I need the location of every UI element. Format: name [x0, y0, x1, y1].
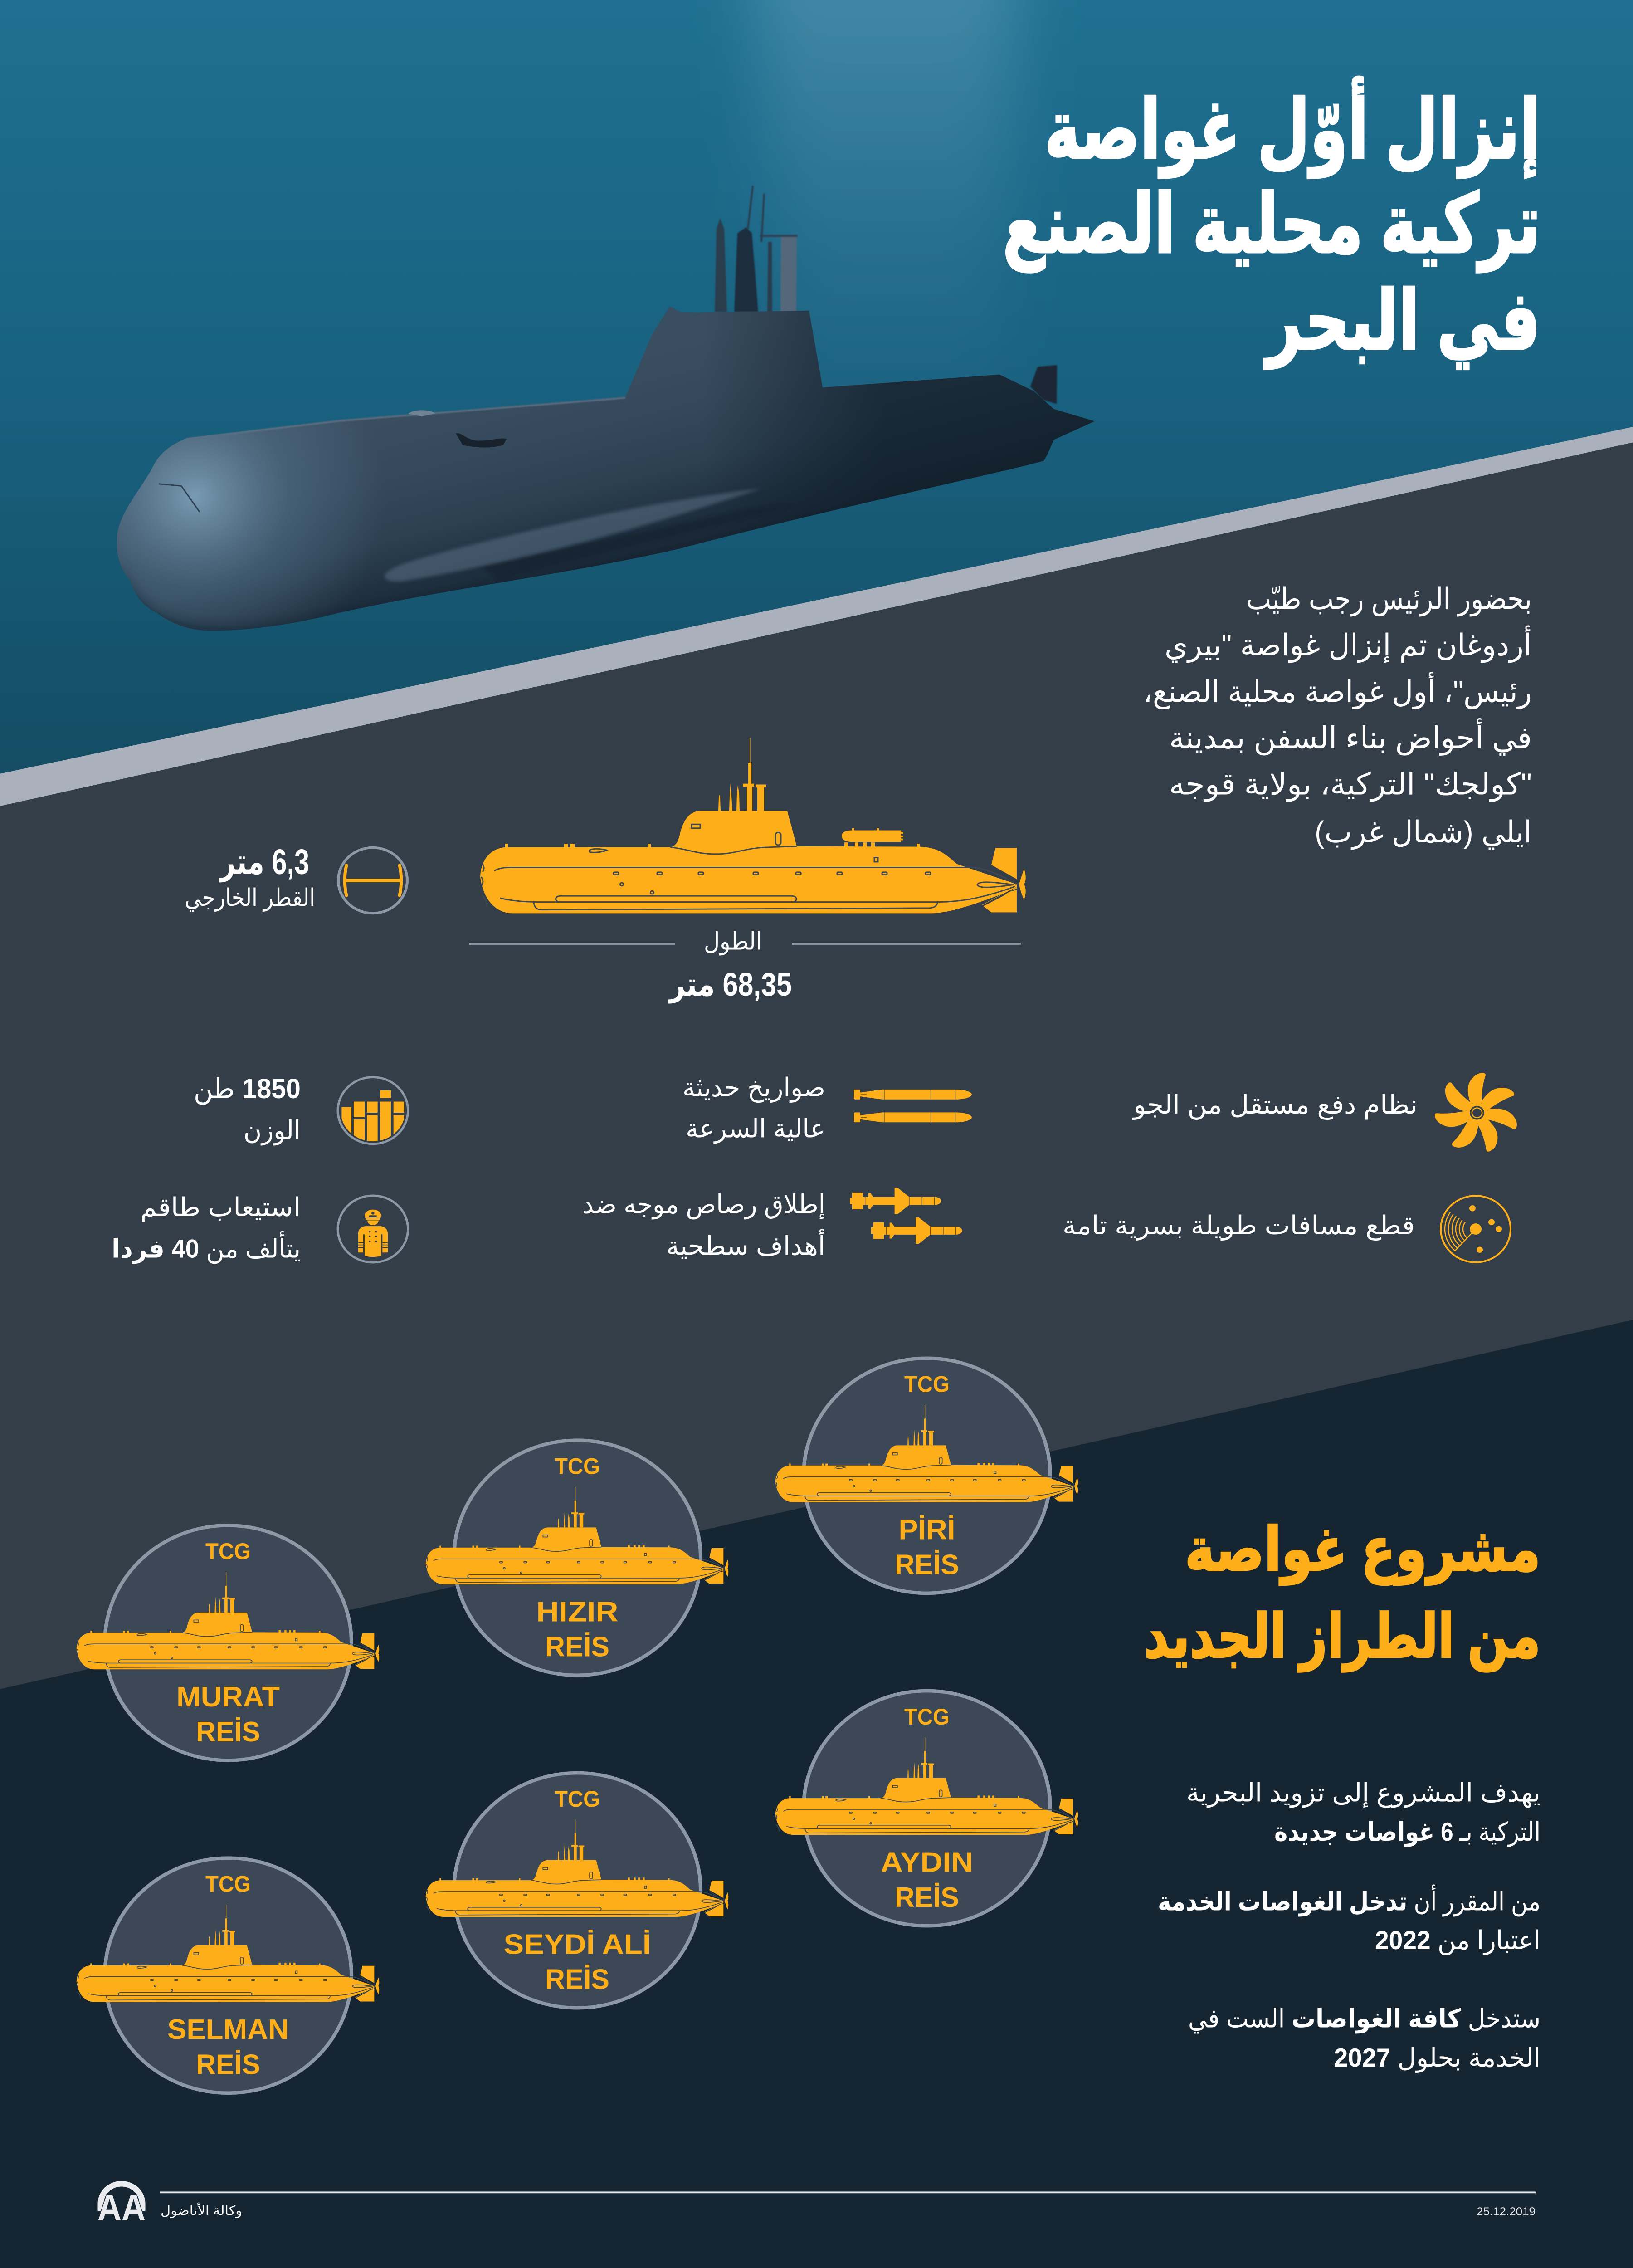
footer: [97, 2184, 1536, 2229]
badge: TCG Murat Reis: REİS: [196, 1716, 260, 1748]
periscope masts: [715, 186, 798, 312]
badge: TCG Piri Reis: REİS: [895, 1549, 959, 1580]
badge: TCG Selman Reis: REİS: [196, 2049, 260, 2080]
propulsion text: نظام دفع مستقل من الجو: [1132, 1091, 1418, 1120]
badge: TCG Seydi Ali Reis: SEYDİ ALİ: [503, 1929, 651, 1960]
deck cylinder: [842, 828, 903, 842]
background: underwater sea: [0, 0, 1633, 821]
logo: Anadolu Agency: AA: [97, 2187, 146, 2229]
intro paragraph: أردوغان تم إنزال غواصة "بيري: [1165, 625, 1532, 663]
intro paragraph: ايلي (شمال غرب): [1315, 816, 1532, 850]
badge: TCG Hizir Reis: TCG: [555, 1453, 600, 1479]
missiles text: [582, 1190, 825, 1261]
badge: TCG Hizir Reis: HIZIR: [536, 1597, 618, 1628]
large submarine diagram: [480, 738, 1026, 913]
project heading: مشروع غواصة: [1185, 1515, 1540, 1585]
badge: TCG Selman Reis: TCG: [205, 1871, 251, 1897]
badge: TCG Piri Reis: PİRİ: [899, 1515, 955, 1545]
intro paragraph: في أحواض بناء السفن بمدينة: [1169, 718, 1532, 756]
diameter label: القطر الخارجي: [185, 884, 315, 912]
project details text: [1158, 1779, 1540, 2073]
weight text: 1850 طن: [194, 1073, 301, 1105]
project details text: الخدمة بحلول 2027: [1334, 2043, 1540, 2073]
badge: TCG Piri Reis: TCG: [904, 1371, 950, 1397]
icon: diameter: [338, 848, 407, 913]
range text: قطع مسافات طويلة بسرية تامة: [1063, 1211, 1415, 1241]
torpedoes text: عالية السرعة: [686, 1114, 825, 1144]
badge: TCG Piri Reis: [775, 1358, 1078, 1593]
badge: TCG Aydin Reis: TCG: [904, 1704, 950, 1730]
project details text: التركية بـ 6 غواصات جديدة: [1274, 1818, 1540, 1848]
badge: TCG Murat Reis: [77, 1525, 379, 1760]
length block: [469, 928, 1021, 1004]
crew text: [112, 1193, 301, 1264]
hull and sail: [117, 307, 1095, 631]
diameter block: [185, 842, 407, 913]
icon: crew member: [338, 1196, 408, 1262]
missiles text: إطلاق رصاص موجه ضد: [582, 1190, 825, 1220]
badge: TCG Murat Reis: TCG: [205, 1538, 251, 1564]
project details text: يهدف المشروع إلى تزويد البحرية: [1186, 1779, 1540, 1808]
badge: TCG Aydin Reis: [775, 1691, 1078, 1926]
icon: weight: [338, 1077, 408, 1144]
icon: propeller: [1434, 1073, 1520, 1153]
badge: TCG Seydi Ali Reis: TCG: [555, 1786, 600, 1812]
badge: TCG Seydi Ali Reis: [426, 1773, 728, 2008]
icon: sonar: [1441, 1196, 1511, 1262]
project details text: اعتبارا من 2022: [1375, 1926, 1540, 1956]
agency name: وكالة الأناضول: [161, 2202, 242, 2218]
length label: الطول: [704, 928, 762, 955]
weight text: الوزن: [244, 1116, 301, 1146]
badge: TCG Hizir Reis: [426, 1440, 728, 1675]
light ray from the surface: [748, 0, 1020, 454]
badge: TCG Murat Reis: MURAT: [176, 1681, 280, 1713]
intro paragraph: بحضور الرئيس رجب طيّب: [1246, 582, 1532, 616]
icon: guided missiles: [850, 1188, 962, 1244]
missiles text: أهداف سطحية: [666, 1229, 825, 1261]
length value: 68,35 متر: [668, 966, 792, 1004]
weight text: [194, 1073, 301, 1146]
intro paragraph: [1143, 582, 1532, 850]
intro paragraph: "كولجك" التركية، بولاية قوجه: [1169, 767, 1532, 802]
badge: TCG Seydi Ali Reis: REİS: [545, 1964, 609, 1995]
torpedoes text: صواريخ حديثة: [682, 1073, 825, 1103]
torpedoes text: [682, 1073, 825, 1144]
date: 25.12.2019: [1477, 2205, 1536, 2218]
crew text: يتألف من 40 فردا: [112, 1231, 301, 1264]
icon: torpedoes: [854, 1090, 972, 1122]
intro paragraph: رئيس"، أول غواصة محلية الصنع،: [1143, 671, 1532, 709]
title: [1003, 76, 1540, 369]
badge: TCG Selman Reis: SELMAN: [167, 2014, 289, 2045]
diagonal band: [0, 427, 1633, 806]
project details text: ستدخل كافة الغواصات الست في: [1188, 2004, 1540, 2034]
panel: dark middle background: [0, 442, 1633, 1693]
panel: submarine photograph: [45, 186, 1134, 674]
badge: TCG Aydin Reis: REİS: [895, 1882, 959, 1913]
badge: TCG Aydin Reis: AYDIN: [881, 1847, 973, 1878]
project heading: [1144, 1515, 1540, 1672]
badge: TCG Selman Reis: [77, 1858, 379, 2093]
diameter value: 6,3 متر: [219, 842, 309, 883]
badge: TCG Hizir Reis: REİS: [545, 1632, 609, 1662]
project details text: من المقرر أن تدخل الغواصات الخدمة: [1158, 1884, 1540, 1917]
stern fin: [1030, 365, 1057, 404]
crew text: استيعاب طاقم: [140, 1193, 301, 1222]
hull rail and fittings: [187, 398, 625, 439]
panel: bottom navy background: [0, 1320, 1633, 2268]
